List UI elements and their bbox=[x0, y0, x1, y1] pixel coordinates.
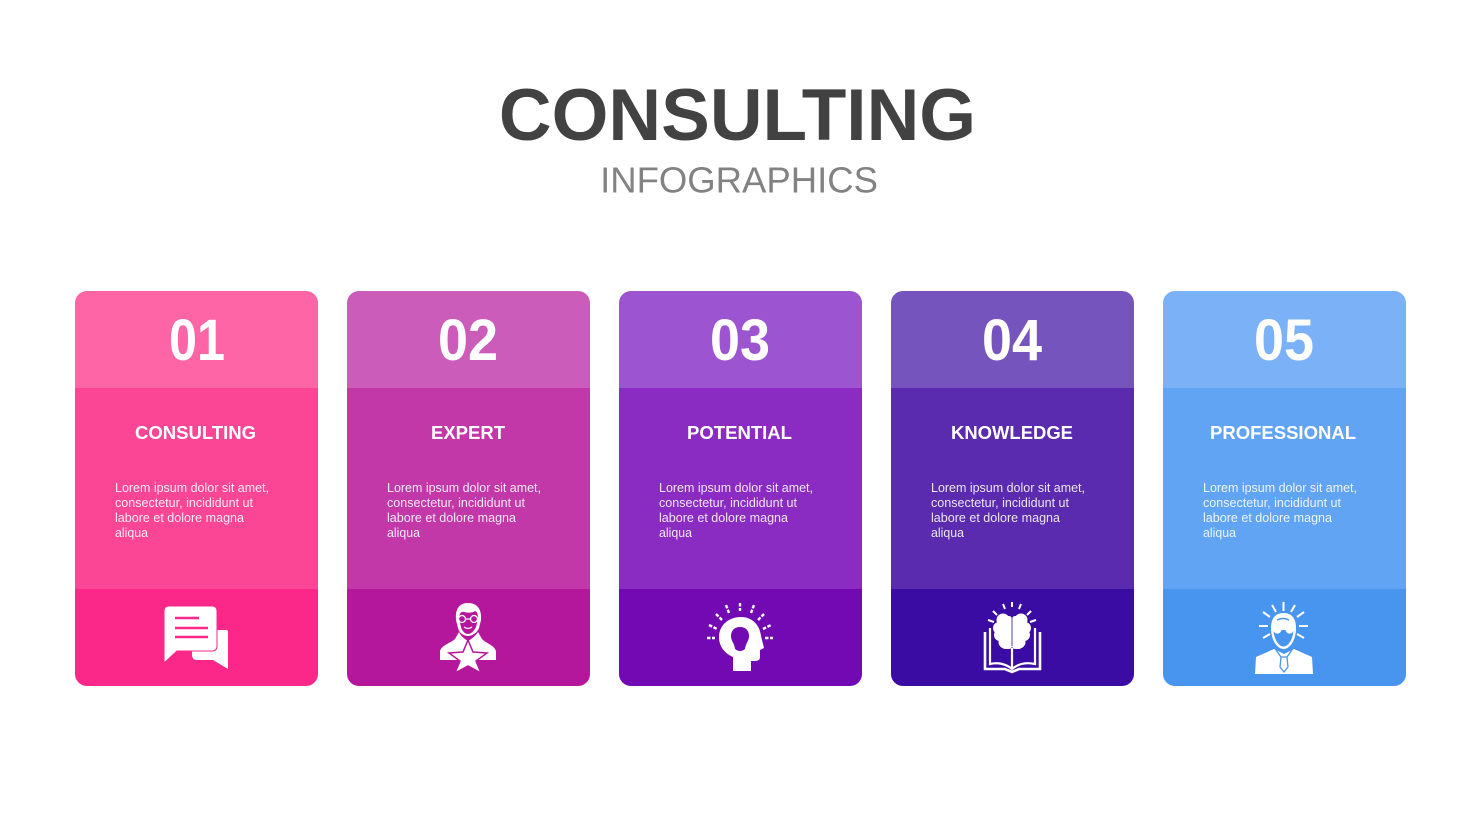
text block: consectetur, incididunt ut bbox=[1203, 496, 1342, 510]
title: CONSULTING bbox=[499, 75, 976, 156]
text block: Lorem ipsum dolor sit amet, bbox=[1203, 481, 1357, 495]
text block: consectetur, incididunt ut bbox=[115, 496, 254, 510]
heading: consulting: CONSULTING bbox=[135, 422, 256, 443]
text block: aliqua bbox=[115, 526, 148, 540]
number 01: 01 bbox=[169, 308, 225, 373]
text block bbox=[387, 481, 541, 540]
text block: labore et dolore magna bbox=[931, 511, 1060, 525]
panel: 03 potential bbox=[619, 291, 862, 686]
number 03: 03 bbox=[710, 308, 770, 373]
heading: expert: EXPERT bbox=[431, 422, 505, 443]
text block bbox=[931, 481, 1085, 540]
icon: brain over open book bbox=[985, 602, 1040, 672]
panel: 04 knowledge bbox=[891, 291, 1134, 686]
text block: Lorem ipsum dolor sit amet, bbox=[659, 481, 813, 495]
text block: Lorem ipsum dolor sit amet, bbox=[115, 481, 269, 495]
text block: labore et dolore magna bbox=[659, 511, 788, 525]
text block: consectetur, incididunt ut bbox=[931, 496, 1070, 510]
text block bbox=[1203, 481, 1357, 540]
panel: 02 expert bbox=[347, 291, 590, 686]
panel: 01 consulting bbox=[75, 291, 318, 686]
text block: labore et dolore magna bbox=[387, 511, 516, 525]
number 05: 05 bbox=[1254, 308, 1314, 373]
text block: aliqua bbox=[659, 526, 692, 540]
text block: aliqua bbox=[1203, 526, 1236, 540]
icon: expert with star bbox=[440, 603, 496, 673]
text block: labore et dolore magna bbox=[115, 511, 244, 525]
panel: 05 professional bbox=[1163, 291, 1406, 686]
text block: consectetur, incididunt ut bbox=[659, 496, 798, 510]
text block: Lorem ipsum dolor sit amet, bbox=[387, 481, 541, 495]
text block: labore et dolore magna bbox=[1203, 511, 1332, 525]
text block: aliqua bbox=[387, 526, 420, 540]
text block: Lorem ipsum dolor sit amet, bbox=[931, 481, 1085, 495]
icon: professional in sunglasses bbox=[1255, 602, 1313, 674]
heading: potential: POTENTIAL bbox=[687, 422, 792, 443]
heading: knowledge: KNOWLEDGE bbox=[951, 422, 1073, 443]
text block: aliqua bbox=[931, 526, 964, 540]
text block bbox=[659, 481, 813, 540]
text block bbox=[115, 481, 269, 540]
icon: head with light bulb bbox=[707, 603, 773, 671]
icon: chat bubbles bbox=[164, 606, 228, 669]
subtitle: INFOGRAPHICS bbox=[600, 160, 878, 200]
number 02: 02 bbox=[438, 308, 498, 373]
number 04: 04 bbox=[982, 308, 1042, 373]
text block: consectetur, incididunt ut bbox=[387, 496, 526, 510]
heading: professional: PROFESSIONAL bbox=[1210, 422, 1356, 443]
